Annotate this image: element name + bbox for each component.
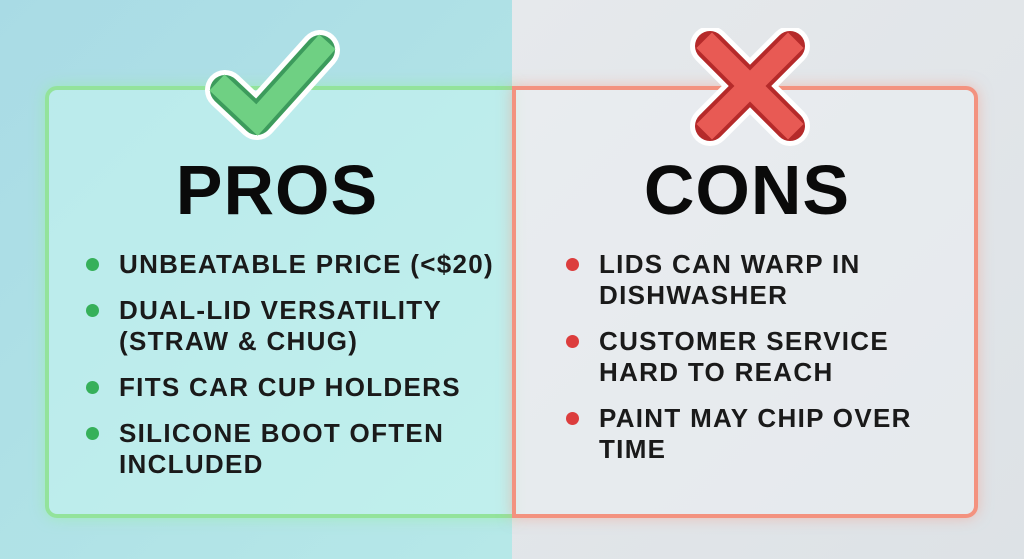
list: pros: INCLUDED <box>119 449 264 479</box>
list: cons: CUSTOMER SERVICE <box>599 326 889 356</box>
heading: pros: PROS <box>176 151 378 229</box>
list: cons: PAINT MAY CHIP OVER <box>599 403 912 433</box>
list: cons <box>566 249 912 464</box>
list: cons: LIDS CAN WARP IN <box>599 249 861 279</box>
list: cons: DISHWASHER <box>599 280 788 310</box>
list: pros: UNBEATABLE PRICE (<$20) <box>119 249 494 279</box>
list: pros: DUAL-LID VERSATILITY <box>119 295 442 325</box>
icon: checkmark <box>205 30 340 140</box>
list: cons: TIME <box>599 434 666 464</box>
list: cons: HARD TO REACH <box>599 357 834 387</box>
panel: pros <box>45 86 513 518</box>
icon: cross <box>690 28 810 146</box>
list: pros: FITS CAR CUP HOLDERS <box>119 372 461 402</box>
panel: cons <box>512 86 978 518</box>
list: pros <box>86 249 494 479</box>
list: pros: (STRAW & CHUG) <box>119 326 358 356</box>
list: pros: SILICONE BOOT OFTEN <box>119 418 444 448</box>
heading: cons: CONS <box>644 151 850 229</box>
